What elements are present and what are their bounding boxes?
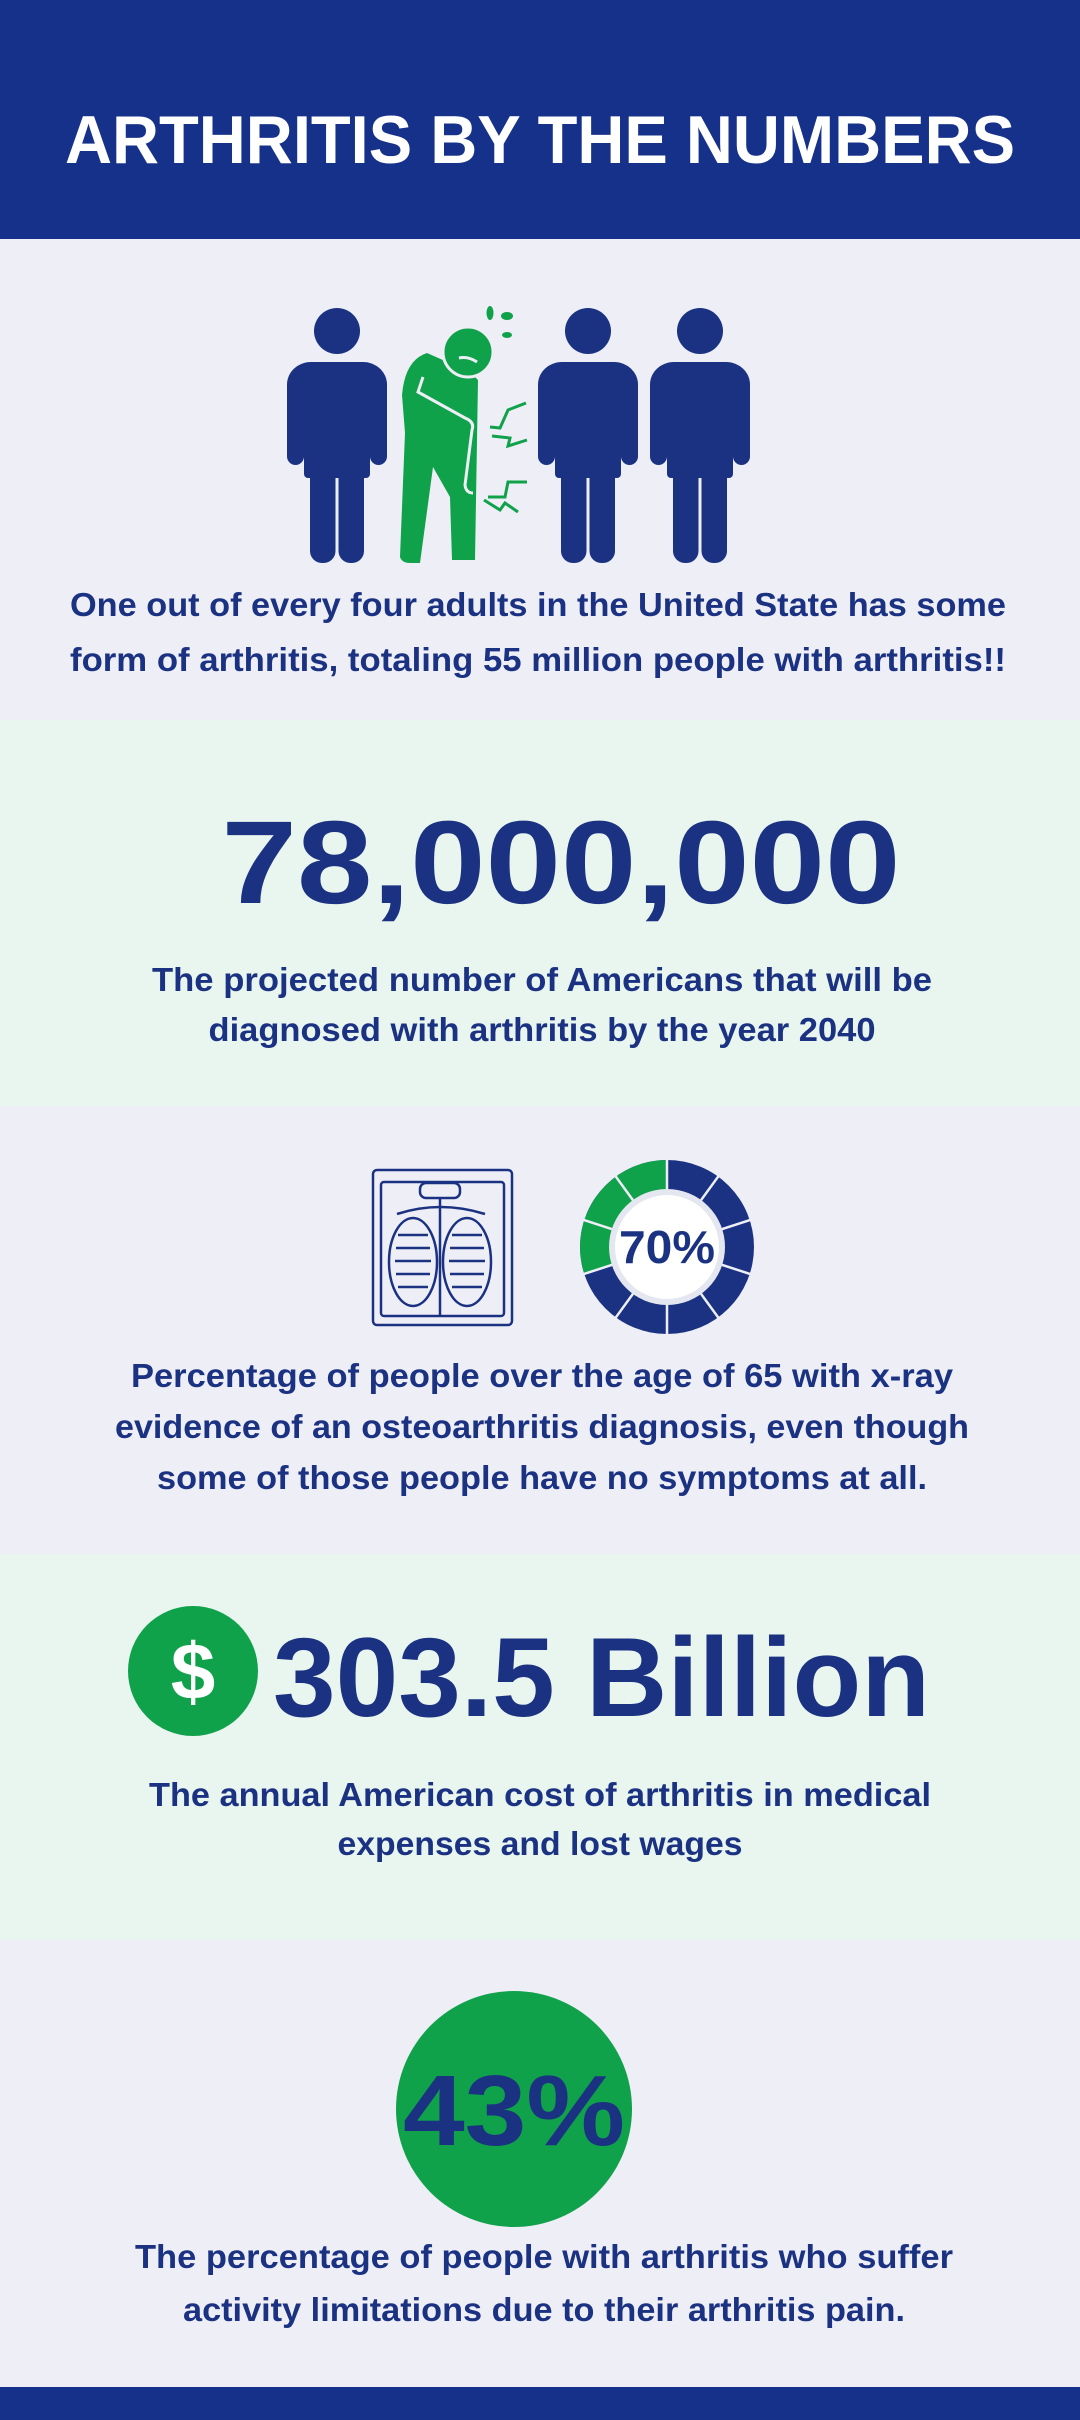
chart: donut 70%: 70%: [619, 1221, 715, 1273]
text: x-ray percentage: some of those people have no symptoms at all.: [157, 1459, 927, 1496]
icon: green circle 43%: [396, 1991, 632, 2227]
header: [0, 0, 1080, 239]
text: one out of every four: form of arthritis, totaling 55 million people with arthritis!!: [70, 641, 1006, 678]
text: x-ray percentage: evidence of an osteoarthritis diagnosis, even though: [115, 1408, 969, 1445]
icon: x-ray: [373, 1170, 512, 1325]
text: one out of every four: [70, 586, 1006, 678]
icon: green circle 43%: 43%: [403, 2055, 625, 2167]
text: activity limitations: activity limitations due to their arthritis pain.: [183, 2291, 905, 2328]
icon: dollar circle: [128, 1606, 258, 1736]
panel: 78 million projection: [0, 720, 1080, 1106]
text: activity limitations: The percentage of people with arthritis who suffer: [135, 2238, 953, 2275]
big number: cost: 303.5 Billion: [273, 1615, 930, 1740]
chart: donut 70%: [580, 1157, 754, 1337]
text: x-ray percentage: [115, 1357, 969, 1496]
icon: green person in pain: [400, 306, 527, 563]
text: projection: The projected number of Americans that will be: [152, 961, 932, 998]
text: cost description: expenses and lost wages: [338, 1825, 742, 1862]
panel: one in four adults: [0, 239, 1080, 720]
panel: 70% x-ray: [0, 1106, 1080, 1554]
title: ARTHRITIS BY THE NUMBERS: [65, 102, 1015, 178]
text: one out of every four: One out of every four adults in the United State has some: [70, 586, 1006, 623]
big number: 78,000,000: [222, 797, 900, 929]
panel: 43% activity limitations: [0, 1940, 1080, 2387]
icon: dollar circle: $: [171, 1627, 215, 1716]
text: x-ray percentage: Percentage of people over the age of 65 with x-ray: [131, 1357, 954, 1394]
text: cost description: The annual American cost of arthritis in medical: [149, 1776, 931, 1813]
icon: people figures: [287, 306, 750, 563]
text: projection: diagnosed with arthritis by the year 2040: [208, 1011, 876, 1048]
text: projection: [152, 961, 932, 1048]
text: activity limitations: [135, 2238, 953, 2328]
footer bar: [0, 2387, 1080, 2420]
text: cost description: [149, 1776, 931, 1862]
panel: cost: [0, 1554, 1080, 1940]
